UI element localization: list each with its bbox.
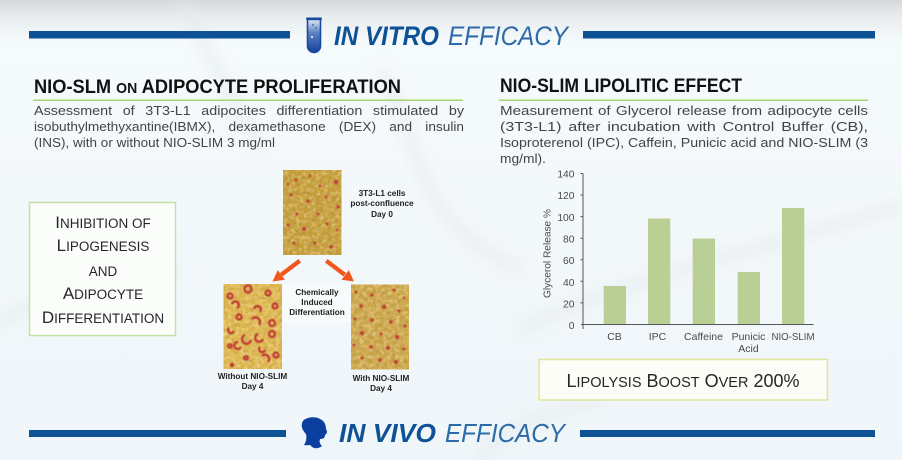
axes [580, 174, 814, 329]
y axis labels [557, 170, 575, 332]
text block: measurement: (3T3-L1) after incubation with Control Buffer (CB), [500, 119, 868, 134]
x axis labels: Acid [738, 343, 759, 355]
callout: inhibition of lipogenesis: DIFFERENTIATION [42, 308, 164, 327]
icon: head silhouette [302, 417, 327, 448]
photo: with nio-slim [351, 284, 409, 370]
label: chemically induced [283, 284, 351, 323]
x axis labels: Caffeine [684, 331, 723, 343]
label: day 0: post-confluence [350, 199, 414, 208]
callout: inhibition of lipogenesis: LIPOGENESIS [57, 236, 149, 255]
header: in vitro efficacy [29, 18, 875, 52]
arrow: to with nio-slim [325, 259, 354, 282]
label: day 0 [350, 189, 414, 219]
label: chemically induced: Chemically [295, 288, 339, 297]
label: day 0: Day 0 [371, 210, 393, 219]
y axis title: Glycerol Release % [542, 209, 554, 298]
callout: inhibition of lipogenesis: INHIBITION OF [55, 213, 151, 232]
text block: measurement: Measurement of Glycerol release from adipocyte cells [500, 103, 869, 118]
label: with nio-slim: With NIO-SLIM [353, 374, 410, 383]
callout: lipolysis boost: LIPOLYSIS BOOST OVER 200% [566, 371, 800, 391]
photo: without nio-slim [224, 284, 282, 369]
callout: inhibition of lipogenesis: ADIPOCYTE [63, 284, 143, 303]
text block: assessment: (INS), with or without NIO-SLIM 3 mg/ml [34, 135, 275, 150]
bar chart: glycerol release [542, 170, 815, 355]
text block: assessment: isobuthylmethyxantine(IBMX), dexamethasone (DEX) and insulin [34, 119, 464, 134]
panel: adipocyte proliferation [33, 76, 465, 150]
text block: measurement: Isoproterenol (IPC), Caffein, Punicic acid and NIO-SLIM (3 [500, 135, 868, 150]
label: without nio-slim: Day 4 [242, 382, 264, 391]
x axis labels: Punicic [732, 331, 765, 343]
footer: in vivo efficacy [29, 417, 875, 448]
x axis labels: IPC [649, 331, 667, 343]
callout: lipolysis boost [539, 360, 828, 400]
y axis labels: 40 [563, 278, 575, 289]
label: with nio-slim: Day 4 [370, 384, 392, 393]
heading text: IN VIVO [339, 418, 436, 448]
photo: cells day 0 [283, 170, 342, 255]
label: day 0: 3T3-L1 cells [359, 189, 406, 198]
arrow: to without nio-slim [272, 259, 301, 282]
y axis labels: 100 [557, 213, 575, 224]
y axis labels: 140 [557, 170, 575, 180]
heading text: IN VITRO [334, 21, 439, 51]
heading text [339, 418, 567, 448]
callout: inhibition of lipogenesis [30, 202, 176, 336]
label: chemically induced: Differentiation [289, 308, 345, 317]
y axis labels: 80 [563, 234, 575, 246]
label: without nio-slim [218, 372, 287, 391]
panel: lipolitic effect [499, 75, 869, 166]
icon: test tube [306, 18, 322, 52]
label: chemically induced: Induced [301, 298, 333, 307]
text block: measurement: mg/ml). [500, 151, 546, 166]
label: with nio-slim [353, 374, 410, 393]
heading: lipolitic effect: NIO-SLIM LIPOLITIC EFFECT [500, 75, 742, 97]
y axis labels: 20 [563, 300, 575, 310]
x axis labels [607, 331, 815, 355]
heading text: EFFICACY [445, 418, 567, 448]
y axis labels: 120 [557, 191, 575, 202]
x axis labels: NIO-SLIM [771, 332, 815, 343]
label: without nio-slim: Without NIO-SLIM [218, 372, 287, 381]
x axis labels: CB [607, 331, 622, 343]
callout: inhibition of lipogenesis: AND [89, 264, 117, 279]
text block: assessment: Assessment of 3T3-L1 adipocites differentiation stimulated by [34, 103, 465, 118]
heading text [334, 21, 570, 51]
text block: assessment [34, 103, 465, 150]
y axis labels: 0 [569, 321, 575, 332]
heading text: EFFICACY [448, 21, 570, 51]
diagram: adipocyte differentiation [218, 170, 414, 393]
heading: proliferation: NIO-SLM ON ADIPOCYTE PROLIFERATION [34, 76, 401, 98]
y axis labels: 60 [563, 256, 575, 267]
bars [604, 208, 804, 324]
text block: measurement [500, 103, 869, 166]
